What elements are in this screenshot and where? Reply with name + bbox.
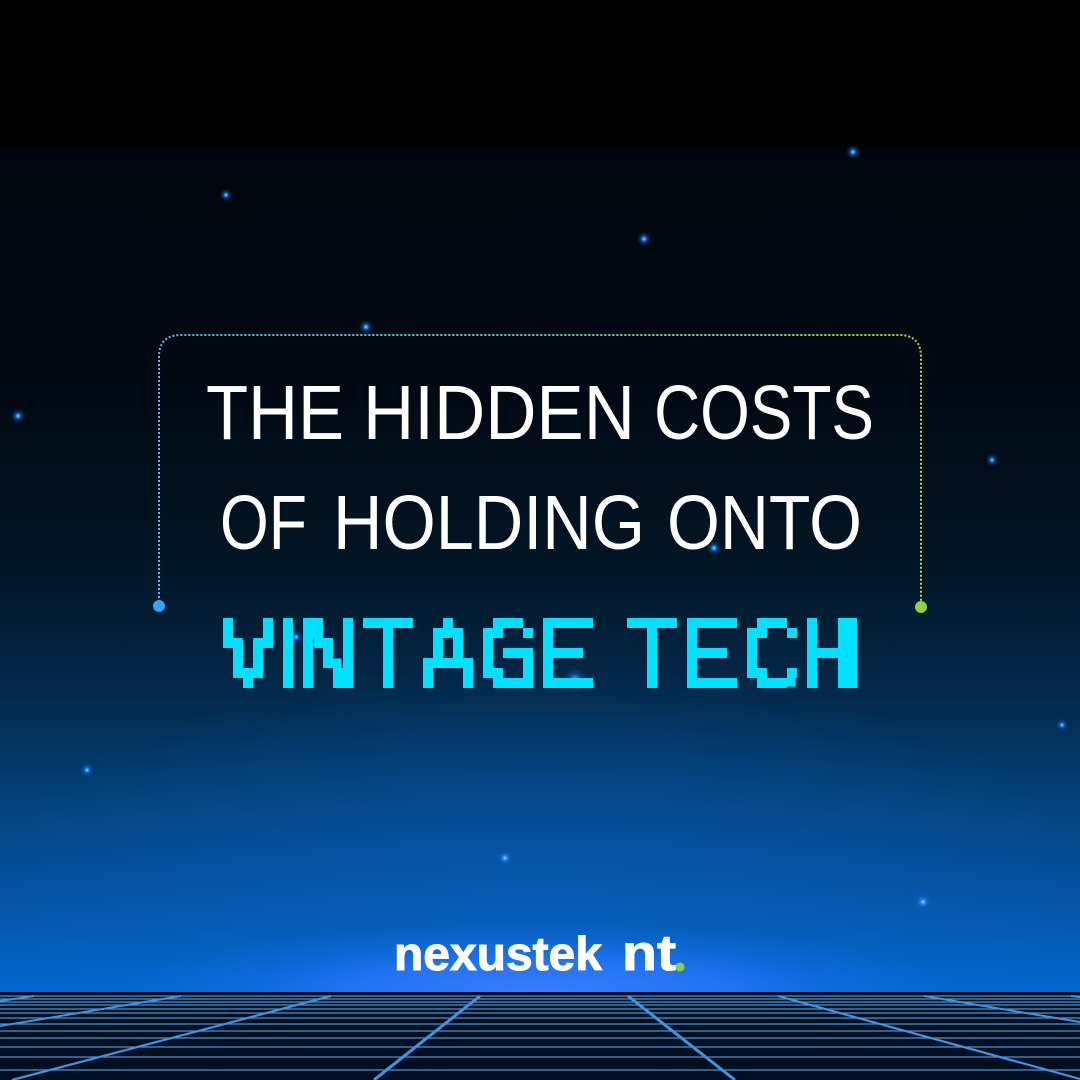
title: pixel highlight: TECH	[624, 601, 859, 720]
logo mark: nt	[622, 925, 676, 981]
title: pixel highlight	[220, 601, 859, 720]
title: first line	[206, 370, 874, 456]
title: second line: ONTO	[667, 480, 862, 566]
title: second line: OF	[220, 480, 307, 566]
title: second line	[220, 480, 862, 566]
logo wordmark: nexustek	[394, 927, 603, 980]
perspective grid floor	[0, 992, 1080, 1080]
title: first line: COSTS	[654, 370, 874, 456]
title: first line: HIDDEN	[363, 370, 635, 456]
title: pixel highlight: NTAGE	[300, 601, 595, 720]
title: pixel highlight: I	[276, 602, 300, 709]
title: pixel highlight: V	[220, 601, 276, 720]
dotted rounded frame with end dots	[153, 335, 927, 613]
title: second line: HOLDING	[333, 480, 645, 566]
title: first line: THE	[206, 370, 344, 456]
glowing star particles	[11, 145, 1068, 912]
